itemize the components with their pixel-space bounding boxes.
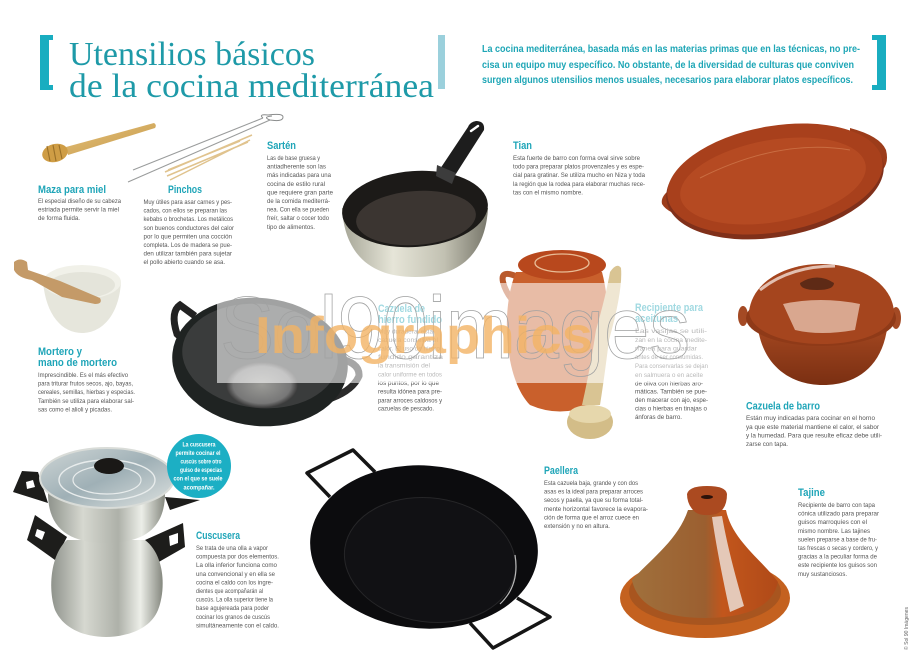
text: Tajine: este recipiente los guisos son [798, 562, 877, 569]
text: Cazuela de hierro fundido: hierro fundido [378, 314, 442, 326]
text: Sartén: Las de base gruesa y [267, 155, 321, 162]
text: Recipiente para aceitunas [635, 302, 708, 421]
text: Mortero y mano de mortero: Imprescindible. Es el más efectivo [38, 372, 128, 379]
text: Paellera: asas es la ideal para preparar arroces [544, 489, 643, 496]
intro text [482, 44, 860, 86]
text: Recipiente para aceitunas: Las vasijas se utili- [635, 328, 707, 335]
text: Recipiente para aceitunas: Recipiente para [635, 302, 704, 314]
icon: skewers [128, 114, 283, 182]
text: Tajine: cónica utilizado para preparar [798, 511, 880, 518]
callout: couscous bubble: La cuscusera [182, 442, 216, 448]
text: Sartén: tipo de alimentos. [267, 224, 315, 231]
text: Sartén: Sartén [267, 140, 296, 152]
callout: couscous bubble: cuscús sobre otro [180, 460, 222, 466]
text: Cazuela de hierro fundido: la transmisión del [378, 363, 430, 370]
text: Recipiente para aceitunas: den macerar con ajo, espe- [635, 397, 708, 404]
text: Tian: tas con el mismo nombre. [513, 189, 583, 196]
text: Cazuela de hierro fundido: calor uniforme en todos [378, 371, 442, 378]
callout: couscous bubble: con el que se suele [174, 477, 223, 483]
text: Tajine: Tajine [798, 487, 825, 499]
text: Pinchos: Muy útiles para asar carnes y pes- [144, 199, 232, 206]
text: Sartén: que requiere gran parte [267, 189, 333, 196]
text: Tian: cial para gratinar. Se utiliza mucho en Niza y toda [513, 172, 645, 179]
title [69, 36, 434, 105]
text: Pinchos: den utilizar también para sujetar [144, 251, 233, 258]
text: Tajine: guisos marroquíes con el [798, 519, 867, 526]
callout: couscous bubble: permite cocinar el [176, 451, 221, 457]
text: Cazuela de hierro fundido: cazuela conserva el [378, 337, 438, 344]
text: Pinchos: el pollo abierto cuando se asa. [144, 259, 225, 266]
text: Cazuela de hierro fundido: Muy duradera, esta [378, 328, 433, 335]
text: Mortero y mano de mortero: sas como el alioli y picadas. [38, 406, 112, 413]
text: Paellera [544, 465, 648, 530]
text: Tian: Esta fuerte de barro con forma oval sirve sobre [513, 155, 640, 162]
text: Cuscusera: dientes que acompañarán al [196, 588, 263, 595]
text: Cuscusera: cuscús. La olla superior tiene la [196, 597, 273, 604]
text: Cazuela de hierro fundido: resulta idónea para pre- [378, 388, 442, 395]
text: Tajine: mismo nombre. Las tajines [798, 528, 870, 535]
icon: mortar and pestle [14, 260, 121, 333]
text: Tajine: muy sustanciosos. [798, 571, 847, 578]
credit: © Sol 90 Imágenes [903, 607, 910, 650]
text: Cuscusera: Se trata de una olla a vapor [196, 545, 269, 552]
text: Pinchos: Pinchos [168, 184, 202, 196]
intro text: cisa un equipo muy específico. No obstante, de la diversidad de culturas que conviven [482, 60, 854, 71]
text: Recipiente para aceitunas: en salmuera o en aceite [635, 372, 703, 379]
text: Tajine: Recipiente de barro con tapa [798, 502, 875, 509]
text: Cazuela de barro: Cazuela de barro [746, 400, 820, 412]
text: Paellera: secos y paella, ya que su forma total- [544, 497, 643, 504]
text: Recipiente para aceitunas: ánforas de barro. [635, 414, 682, 421]
icon: couscous steamer [13, 448, 200, 637]
text: Cazuela de barro: Están muy indicadas para cocinar en el horno [746, 415, 875, 422]
text: Cazuela de barro [746, 400, 882, 448]
text: Maza para miel [38, 184, 121, 222]
text: Tian: Tian [513, 140, 532, 152]
text: Sartén: nea. Con ella se pueden [267, 207, 329, 214]
text: Cuscusera: compuesta por dos elementos. [196, 554, 279, 561]
text: Cazuela de hierro fundido: Cazuela de [378, 303, 425, 315]
text: Paellera: Paellera [544, 465, 579, 477]
icon: paella pan [305, 450, 550, 648]
text: Tajine: gracias a la peculiar forma de [798, 554, 877, 561]
text: Cazuela de hierro fundido: fundido garantiza [378, 354, 444, 361]
callout: couscous bubble: acompañar. [184, 485, 215, 491]
text: Tajine: suelen preparse a base de fru- [798, 536, 877, 543]
text: Mortero y mano de mortero: para triturar frutos secos, ajo, bayas, [38, 381, 133, 388]
text: Cazuela de barro: y la humedad. Para que resulte eficaz debe utili- [746, 432, 882, 440]
icon: cast iron casserole [166, 289, 359, 435]
watermark: Sol90images [220, 278, 690, 377]
text: Tian: todo para preparar platos provenzales y es espe- [513, 164, 644, 171]
title: Utensilios básicos [69, 36, 315, 73]
icon: clay casserole with lid [738, 264, 901, 385]
text: Sartén: antiadherente son las [267, 164, 326, 171]
text: Paellera: ción de forma que el arroz cuece en [544, 514, 639, 521]
icon: honey dipper [40, 123, 156, 165]
text: Cuscusera: cocina el caldo con los ingre- [196, 579, 273, 586]
text: Recipiente para aceitunas: de oliva con hierbas aro- [635, 380, 703, 387]
text: Pinchos: por lo que permiten una cocción [144, 233, 232, 240]
text: Sartén: cocina de estilo rural [267, 181, 325, 188]
text: Cazuela de hierro fundido: calor. El uso de hierro [378, 345, 440, 352]
text: Mortero y mano de mortero [38, 346, 135, 413]
text: Cuscusera: simultáneamente con el caldo. [196, 622, 279, 629]
text: Cuscusera: La olla inferior funciona como [196, 562, 277, 569]
text: Tian: la región que la rodea para elaborar muchas rece- [513, 181, 645, 188]
callout: couscous bubble: guiso de especias [180, 468, 223, 474]
text: Recipiente para aceitunas: cias o hierbas en tinajas o [635, 405, 707, 412]
text: Paellera: extensión y no en altura. [544, 523, 610, 530]
text: Recipiente para aceitunas: rránea para guardar [635, 345, 698, 352]
left bracket [40, 35, 53, 90]
watermark: Infographics [255, 307, 593, 365]
text: Recipiente para aceitunas: Para conservarlas se dejan [635, 363, 708, 370]
icon: clay jar with ladle [503, 250, 621, 439]
right bracket [872, 35, 886, 90]
text: Cazuela de hierro fundido: parar arroces caldosos y [378, 397, 443, 404]
text: Sartén: más indicadas para una [267, 172, 331, 179]
text: Pinchos: cados, con ellos se preparan las [144, 208, 227, 215]
text: Mortero y mano de mortero: También se utiliza para elaborar sal- [38, 398, 134, 405]
text: Mortero y mano de mortero: Mortero y [38, 346, 83, 358]
text: Maza para miel: Maza para miel [38, 184, 106, 196]
text: Mortero y mano de mortero: cereales, semillas, hierbas y especias. [38, 389, 135, 396]
text: Paellera: Esta cazuela baja, grande y con dos [544, 480, 638, 487]
text: Cuscusera: cocinar los granos de cuscús [196, 614, 270, 621]
title: de la cocina mediterránea [69, 68, 434, 105]
text: Cazuela de hierro fundido: los puntos, por lo que [378, 380, 439, 387]
text: Cazuela de barro: ya que este material mantiene el calor, el sabor [746, 424, 880, 431]
text: Recipiente para aceitunas: antes de ser consumidas. [635, 354, 703, 361]
text: Maza para miel: estriada permite servir la miel [38, 206, 119, 214]
text: Sartén: de la comida mediterrá- [267, 198, 330, 205]
text: Cazuela de hierro fundido: cazuelas de pescado. [378, 406, 434, 413]
text: Sartén: freír, saltar o cocer todo [267, 215, 329, 222]
text: Recipiente para aceitunas: aceitunas [635, 313, 678, 325]
callout: couscous bubble [167, 434, 231, 498]
text: Cuscusera: una convencional y en ella se [196, 571, 275, 578]
text: Tajine [798, 487, 880, 578]
text: Cuscusera [196, 530, 279, 629]
text: Mortero y mano de mortero: mano de mortero [38, 357, 117, 369]
text: Recipiente para aceitunas: zan en la cocina medite- [635, 337, 707, 344]
intro text: La cocina mediterránea, basada más en las materias primas que en las técnicas, no pre- [482, 44, 860, 55]
text: Maza para miel: de forma fluida. [38, 215, 80, 222]
text: Pinchos: son buenos conductores del calor [144, 225, 235, 232]
text: Paellera: mente horizontal favorece la evapora- [544, 506, 648, 513]
text: Tajine: tas frescas o secas y cordero, y [798, 545, 879, 552]
text: Cuscusera: base agujereada para poder [196, 605, 270, 612]
text: Tian [513, 140, 645, 196]
text: Pinchos [144, 184, 235, 266]
text: Sartén [267, 140, 333, 231]
text: Maza para miel: El especial diseño de su cabeza [38, 198, 121, 205]
icon: tian oval dish [657, 108, 893, 255]
text: Recipiente para aceitunas: máticas. También se pue- [635, 388, 707, 396]
text: Cazuela de barro: zarse con tapa. [746, 441, 788, 448]
title divider bar [438, 35, 445, 89]
intro text: surgen algunos utensilios menos usuales, necesarios para elaborar platos específicos. [482, 75, 853, 86]
text: Pinchos: completa. Los de madera se pue- [144, 242, 232, 249]
icon: tajine [620, 486, 790, 638]
text: Pinchos: kebabs o brochetas. Los metálicos [144, 216, 233, 223]
text: Cuscusera: Cuscusera [196, 530, 241, 542]
icon: frying pan [340, 121, 490, 277]
text: Cazuela de hierro fundido [378, 303, 444, 413]
